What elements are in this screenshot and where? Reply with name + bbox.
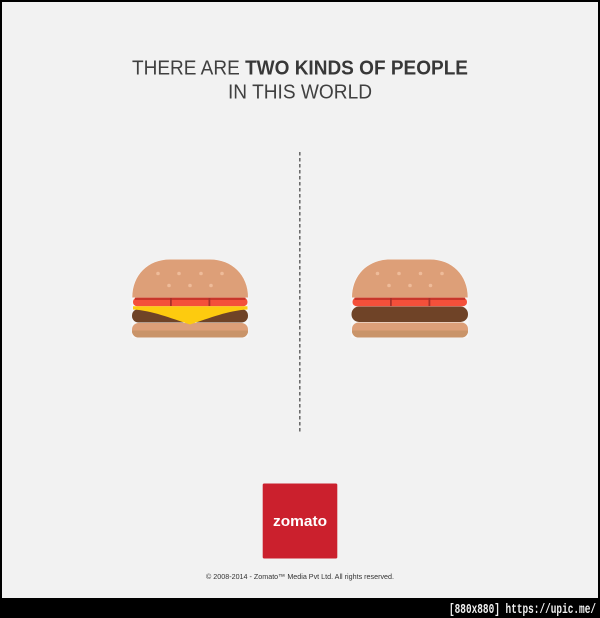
title: IN THIS WORLD [228, 82, 372, 104]
title: THERE ARE TWO KINDS OF PEOPLE [132, 58, 468, 80]
copyright: © 2008-2014 - Zomato™ Media Pvt Ltd. All rights reserved. [206, 572, 394, 581]
title [132, 58, 468, 104]
tomato [133, 298, 248, 306]
sesame seeds [376, 272, 444, 287]
halo [132, 260, 248, 337]
cheese [133, 306, 248, 324]
logo: zomato: zomato [273, 513, 327, 530]
top bun [132, 260, 248, 298]
patty [132, 309, 248, 322]
sesame seeds [156, 272, 224, 287]
logo: zomato [263, 484, 337, 558]
icon: cheeseburger [132, 260, 248, 338]
dashed divider [299, 152, 301, 433]
patty [352, 306, 468, 322]
tomato [352, 298, 467, 306]
icon: plain burger [352, 260, 468, 338]
top bun [352, 260, 468, 298]
halo [352, 260, 468, 337]
bottom bun [132, 323, 248, 338]
bottom bun [352, 322, 468, 338]
